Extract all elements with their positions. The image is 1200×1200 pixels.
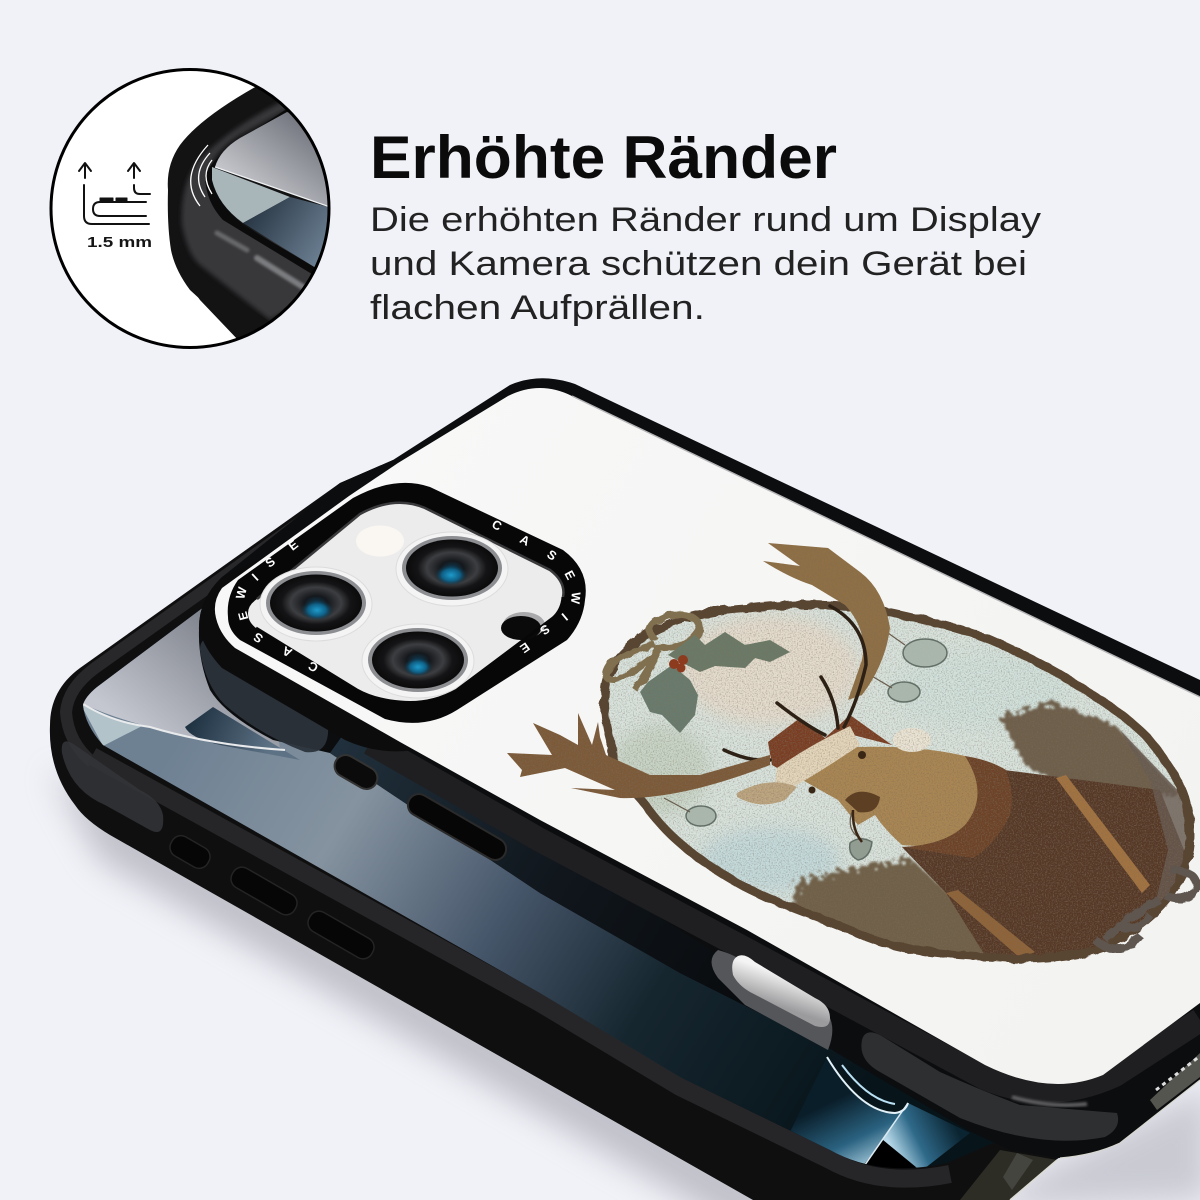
- upper phone dark body: [199, 378, 1200, 1158]
- frame knot: [1095, 870, 1196, 949]
- CASEWISE lettering on ring: E: [286, 537, 301, 553]
- bumper highlight: [217, 233, 247, 250]
- deer ear: [737, 782, 797, 804]
- title: Erhöhte Ränder: [370, 124, 837, 191]
- neck and head: [804, 746, 978, 846]
- upper phone: back side with white case: [199, 378, 1200, 1158]
- lower button: volume up: [227, 863, 301, 919]
- lower button: action: [166, 832, 214, 872]
- lower phone corner pad: [62, 741, 163, 832]
- wallpaper curve line: [80, 702, 285, 750]
- phone drop shadows: [50, 770, 1200, 1200]
- dark notch: [185, 707, 300, 760]
- CASEWISE lettering on ring: C: [489, 517, 504, 534]
- carbon pad under camera: [200, 639, 328, 752]
- CASEWISE lettering on ring: I: [559, 610, 571, 623]
- CASEWISE lettering on ring: E: [517, 639, 532, 656]
- port grille: [1150, 1053, 1200, 1110]
- holly leaves: [640, 632, 790, 733]
- bumper lighter face: [180, 102, 314, 320]
- santa hat: [768, 715, 931, 786]
- bumper bevel upper: [66, 508, 320, 762]
- left antler: [507, 713, 770, 798]
- description text: [370, 201, 1041, 327]
- bow on frame: [606, 615, 700, 690]
- screen light line: [215, 167, 330, 207]
- circle outline: [51, 70, 329, 348]
- measurement label: 1.5 mm: [87, 234, 152, 251]
- black ring: [228, 483, 586, 723]
- dark antler tines: [724, 606, 866, 760]
- CASEWISE lettering on ring: S: [544, 547, 559, 564]
- bumper inner dark: [205, 110, 314, 274]
- flash: [356, 526, 404, 556]
- lower phone bumper: [50, 460, 1060, 1200]
- edge highlight: [572, 396, 1200, 697]
- upper grey wallpaper area: [83, 609, 280, 748]
- blue wallpaper left panel: [790, 1058, 900, 1164]
- christmas ornaments: [686, 639, 947, 860]
- CASEWISE lettering on ring: A: [280, 643, 294, 660]
- inset circle: raised edge close-up: [51, 70, 340, 348]
- lens 2: [396, 532, 508, 606]
- inner ring bevel: [257, 503, 563, 599]
- corner highlight: [1012, 1097, 1087, 1105]
- CASEWISE lettering on ring: E: [561, 568, 578, 582]
- upper right trees: [1000, 702, 1180, 805]
- CASEWISE lettering on ring: E: [236, 610, 251, 622]
- black triangle: [864, 1140, 916, 1168]
- bottom corner pad: [861, 1032, 1118, 1141]
- sweater: [902, 770, 1190, 965]
- ring overlay bottom right: [256, 597, 563, 702]
- CASEWISE lettering on ring: I: [249, 571, 261, 584]
- right antler: [763, 543, 890, 700]
- white back surface: [215, 388, 1200, 1084]
- light lower edge: [1010, 1160, 1057, 1200]
- silver side button: [712, 950, 832, 1050]
- bumper bevel lower: [92, 756, 950, 1179]
- screen pale wedge: [212, 167, 290, 223]
- CASEWISE lettering on ring: S: [263, 554, 278, 570]
- sky: [608, 608, 1186, 956]
- port at bottom edge: [1003, 1153, 1033, 1190]
- bumper: [168, 87, 328, 322]
- lens 3: [362, 624, 474, 698]
- pale blue wedge: [83, 705, 141, 746]
- side button: [404, 790, 510, 864]
- rope frame: [604, 605, 1190, 959]
- camera island: [228, 483, 586, 723]
- lower trees: [788, 852, 984, 954]
- CASEWISE lettering on ring: S: [537, 621, 552, 638]
- raised edge icon: [79, 163, 150, 224]
- edge bevel along white back: [370, 743, 1200, 1091]
- impact arcs: [191, 145, 212, 206]
- lower rim light: [1060, 1080, 1200, 1158]
- lower phone: case seen from the screen side: [50, 460, 1060, 1200]
- case artwork: stag in oval frame: [507, 543, 1200, 970]
- screen dark area: [243, 197, 328, 267]
- ornament strings: [664, 633, 905, 838]
- deer face details: [808, 751, 880, 842]
- lower phone screen: [83, 608, 994, 1168]
- sweater collar: [902, 756, 1012, 858]
- description text: flachen Aufprällen.: [370, 289, 705, 327]
- description text: Die erhöhten Ränder rund um Display: [370, 201, 1041, 239]
- lidar cutout: [503, 612, 545, 638]
- CASEWISE lettering on ring: A: [517, 532, 532, 549]
- screen upper area: [215, 112, 328, 206]
- lidar sensor: [501, 616, 541, 640]
- lower button: volume down: [304, 907, 378, 963]
- description text: und Kamera schützen dein Gerät bei: [370, 245, 1027, 283]
- CASEWISE lettering on ring: W: [233, 585, 250, 601]
- close-up of phone corner: [168, 87, 328, 338]
- CASEWISE lettering on ring: [233, 517, 583, 675]
- blue wallpaper right panel: [883, 1103, 970, 1172]
- olive lower edge: [960, 1150, 1057, 1200]
- edge shading: [1120, 730, 1186, 900]
- camera bumper base: [199, 540, 560, 751]
- CASEWISE lettering on ring: W: [568, 591, 583, 605]
- port grille teeth: [1156, 1056, 1200, 1090]
- holly berries: [669, 655, 688, 672]
- recessed side shading: [330, 725, 827, 1047]
- lower dark bumper: [198, 297, 241, 338]
- silent switch: [331, 751, 381, 793]
- camera plate: [248, 503, 563, 702]
- CASEWISE lettering on ring: C: [306, 658, 320, 675]
- circle base: [51, 70, 329, 348]
- CASEWISE lettering on ring: S: [251, 629, 266, 646]
- lens 1: [260, 567, 372, 641]
